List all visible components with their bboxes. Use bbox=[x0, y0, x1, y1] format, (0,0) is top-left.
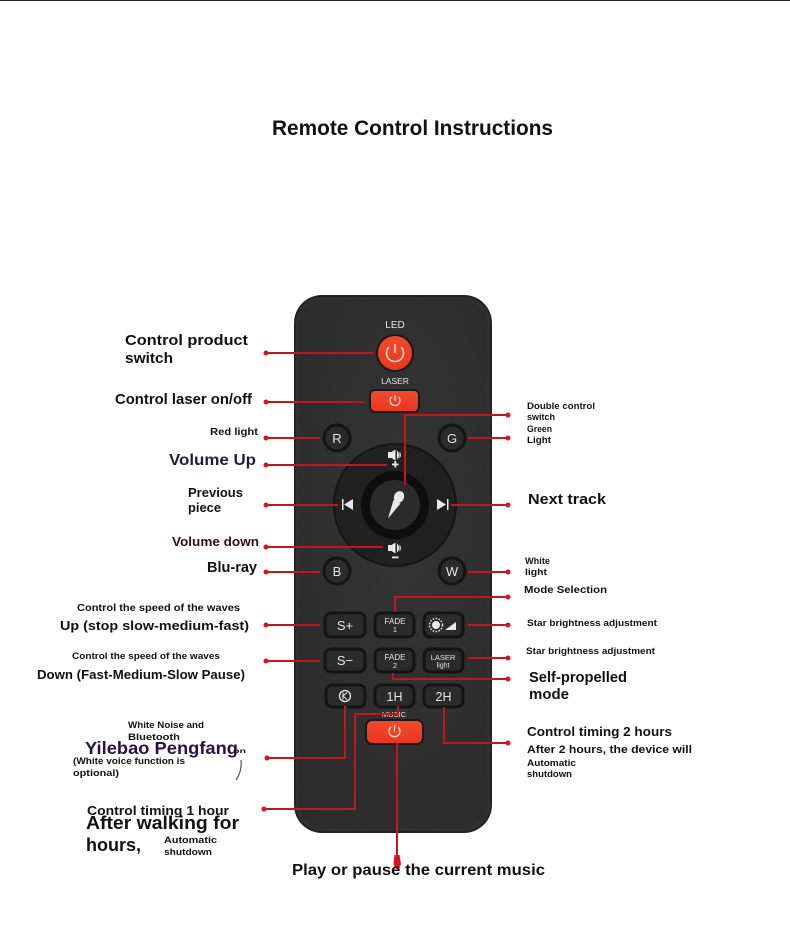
label: white noise and bluetooth bbox=[73, 720, 247, 780]
label: speed down bbox=[37, 651, 245, 682]
label: volume up: Volume Up bbox=[169, 452, 256, 469]
label: white noise and bluetooth: Yilebao Pengfang bbox=[85, 738, 238, 758]
button: music power bbox=[365, 710, 424, 745]
label: control laser: Control laser on/off bbox=[115, 391, 253, 408]
label: control timing 2 hours: After 2 hours, the device will bbox=[527, 744, 692, 756]
label: speed down: Down (Fast-Medium-Slow Pause) bbox=[37, 668, 245, 682]
top border line bbox=[0, 0, 790, 1]
label: control timing 2 hours: shutdown bbox=[527, 769, 572, 779]
button: G: G bbox=[447, 431, 457, 446]
button: music power: MUSIC bbox=[382, 710, 407, 719]
label: control timing 1 hour: shutdown bbox=[164, 847, 212, 857]
label: control product switch: switch bbox=[125, 350, 173, 367]
button: FADE 2: FADE bbox=[385, 653, 405, 662]
button: FADE 2: 2 bbox=[393, 661, 397, 670]
button: laser power bbox=[369, 376, 420, 413]
label: self-propelled mode: Self-propelled bbox=[529, 669, 627, 686]
button: LED power: LED bbox=[385, 320, 405, 331]
icon: microphone bbox=[388, 489, 406, 518]
label: next track: Next track bbox=[528, 491, 607, 508]
button: S- bbox=[325, 649, 365, 672]
label: self-propelled mode bbox=[529, 669, 627, 703]
button: star brightness bbox=[424, 613, 463, 637]
label: control timing 1 hour: Automatic bbox=[164, 835, 217, 845]
label: control product switch: Control product bbox=[125, 332, 248, 349]
button: 1H bbox=[375, 685, 414, 707]
title: Remote Control Instructions bbox=[272, 117, 553, 140]
button: LED power bbox=[376, 320, 414, 372]
button: W bbox=[439, 558, 465, 584]
control wheel bbox=[333, 443, 457, 567]
label: white noise and bluetooth: (White voice function is bbox=[73, 756, 185, 767]
label: white noise and bluetooth: optional) bbox=[73, 768, 119, 779]
label: double control switch: switch bbox=[527, 412, 555, 422]
label: speed up bbox=[60, 603, 249, 633]
label: green light bbox=[527, 424, 552, 445]
label: control product switch bbox=[125, 332, 248, 367]
button: white noise bbox=[326, 685, 365, 707]
button: 1H: 1H bbox=[387, 690, 402, 704]
button: W: W bbox=[446, 564, 459, 579]
label: control timing 1 hour bbox=[86, 803, 239, 857]
button: LASER light: LASER bbox=[431, 653, 456, 662]
icon: previous track bbox=[342, 499, 353, 510]
label: red light: Red light bbox=[210, 426, 259, 438]
label: speed up: Up (stop slow-medium-fast) bbox=[60, 618, 249, 633]
label: green light: Green bbox=[527, 424, 552, 434]
label: white light: light bbox=[525, 567, 547, 577]
label: control timing 1 hour: Control timing 1 hour bbox=[87, 803, 229, 818]
icon: volume down bbox=[388, 542, 401, 558]
label: green light: Light bbox=[527, 435, 551, 445]
label: previous piece: Previous bbox=[188, 486, 243, 500]
icon: next track bbox=[437, 499, 448, 510]
button: R bbox=[324, 425, 350, 451]
button: G bbox=[439, 425, 465, 451]
label: previous piece: piece bbox=[188, 501, 221, 515]
button: LASER light bbox=[424, 649, 463, 672]
label: white noise and bluetooth: Bluetooth bbox=[128, 732, 180, 743]
remote control bbox=[294, 295, 492, 833]
label: play or pause: Play or pause the current music bbox=[292, 862, 545, 879]
label: white noise and bluetooth: on bbox=[233, 749, 247, 755]
button: FADE 1: 1 bbox=[393, 625, 397, 634]
label: double control switch bbox=[527, 401, 595, 422]
label: star brightness adjustment 2: Star brightness adjustment bbox=[526, 646, 656, 657]
label: previous piece bbox=[188, 486, 243, 515]
label: double control switch: Double control bbox=[527, 401, 595, 411]
label: control timing 2 hours: Control timing 2 hours bbox=[527, 725, 672, 739]
button: FADE 1: FADE bbox=[385, 617, 405, 626]
label: speed up: Control the speed of the waves bbox=[77, 603, 240, 614]
button: FADE 1 bbox=[375, 613, 414, 637]
label: white light: White bbox=[525, 556, 550, 566]
label: control timing 1 hour: hours, bbox=[86, 834, 141, 855]
label: star brightness adjustment: Star brightness adjustment bbox=[527, 618, 658, 629]
button: FADE 2 bbox=[375, 649, 414, 672]
button: LASER light: light bbox=[437, 662, 449, 670]
button: B: B bbox=[333, 564, 341, 579]
button: S-: S− bbox=[337, 653, 353, 668]
button: laser power: LASER bbox=[381, 376, 409, 386]
icon: volume up bbox=[388, 450, 401, 468]
button: S+: S+ bbox=[337, 618, 353, 633]
button: R: R bbox=[332, 431, 342, 446]
button: B bbox=[324, 558, 350, 584]
label: blu-ray: Blu-ray bbox=[207, 560, 257, 576]
label: mode selection: Mode Selection bbox=[524, 584, 607, 596]
button: 2H bbox=[424, 685, 463, 707]
label: control timing 1 hour: After walking for bbox=[86, 812, 239, 833]
label: speed down: Control the speed of the waves bbox=[72, 651, 220, 662]
callout lines bbox=[262, 350, 510, 869]
label: volume down: Volume down bbox=[172, 535, 259, 549]
label: self-propelled mode: mode bbox=[529, 686, 569, 703]
label: control timing 2 hours: Automatic bbox=[527, 758, 576, 768]
button: S+ bbox=[325, 613, 365, 637]
remote body bbox=[294, 295, 492, 833]
label: white noise and bluetooth: White Noise and bbox=[128, 720, 204, 731]
button: 2H: 2H bbox=[436, 690, 451, 704]
label: white light bbox=[525, 556, 550, 577]
label: control timing 2 hours bbox=[527, 725, 692, 779]
